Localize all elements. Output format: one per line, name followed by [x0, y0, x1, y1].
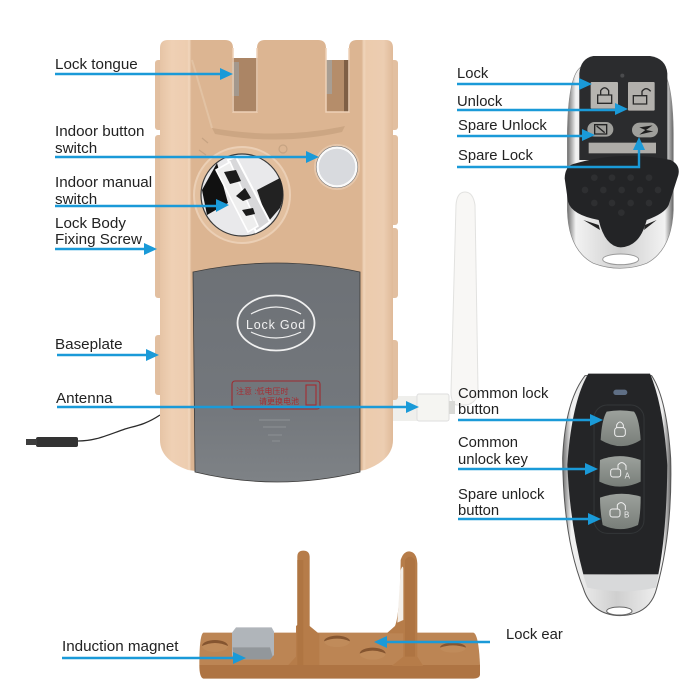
- label: lock body fixing screw: [55, 215, 157, 255]
- label: common unlock key: [458, 435, 598, 475]
- indoor manual switch: [194, 147, 290, 243]
- label: indoor button switch: switch: [55, 140, 97, 157]
- rubber cover: [565, 156, 679, 247]
- spare unlock button: [587, 122, 613, 137]
- label: unlock: [457, 94, 628, 115]
- label: lock body fixing screw: Lock Body: [55, 215, 126, 232]
- spare unlock button: B: [624, 510, 629, 519]
- label: common lock button: Common lock: [458, 386, 549, 402]
- label: spare lock: [457, 137, 645, 167]
- label: spare lock: Spare Lock: [458, 148, 533, 164]
- label: spare unlock: [457, 118, 595, 141]
- key fob 2: [563, 374, 671, 616]
- label: indoor manual switch: [55, 174, 229, 212]
- battery warning label: 注意 :低电压时: [236, 386, 288, 396]
- casing: [160, 40, 393, 482]
- label: lock body fixing screw: Fixing Screw: [55, 231, 142, 248]
- label: lock tongue: [55, 56, 233, 80]
- label: spare unlock button: [458, 487, 601, 525]
- label: antenna: Antenna: [56, 390, 113, 407]
- strike plate bracket: [199, 551, 480, 679]
- label: unlock: Unlock: [457, 94, 503, 110]
- battery warning label: 请更换电池: [259, 396, 299, 406]
- label: spare unlock button: Spare unlock: [458, 487, 545, 503]
- led: [620, 74, 624, 78]
- label: common unlock key: unlock key: [458, 452, 529, 468]
- lock tongue recess: [232, 48, 350, 112]
- engraved marks: [199, 138, 287, 155]
- label: lock: Lock: [457, 66, 489, 82]
- cable with plug: [26, 415, 160, 447]
- lock body: [155, 40, 398, 482]
- unlock button: [628, 82, 655, 111]
- label: indoor manual switch: Indoor manual: [55, 174, 152, 191]
- label: spare unlock button: button: [458, 503, 499, 519]
- spare unlock button: [600, 494, 641, 529]
- label: common lock button: button: [458, 402, 499, 418]
- side lugs: [155, 60, 398, 400]
- base top face: [199, 633, 480, 665]
- common unlock button: A: [625, 472, 631, 481]
- label: baseplate: Baseplate: [55, 336, 123, 353]
- label: lock ear: Lock ear: [506, 627, 563, 643]
- logo: Lock God: [246, 318, 306, 332]
- spare lock button: [632, 123, 658, 137]
- label: baseplate: [55, 336, 159, 361]
- induction magnet: [232, 627, 274, 659]
- label: indoor button switch: Indoor button: [55, 123, 145, 140]
- base front edge: [199, 665, 480, 679]
- black body: [579, 56, 667, 160]
- screw holes: [202, 636, 466, 660]
- label: lock ear: [374, 627, 563, 648]
- label: antenna: [56, 390, 419, 413]
- label: spare unlock: Spare Unlock: [458, 118, 547, 134]
- logo: [238, 296, 314, 350]
- common lock button: [601, 410, 641, 446]
- label: induction magnet: [62, 638, 246, 664]
- label: indoor manual switch: switch: [55, 191, 97, 208]
- key fob 1: [565, 56, 679, 268]
- label: common lock button: [458, 386, 603, 426]
- chrome frame: [567, 67, 673, 268]
- common unlock button: [599, 456, 641, 487]
- indoor button switch: [314, 144, 360, 190]
- grey cover plate: [193, 263, 360, 482]
- label: lock tongue: Lock tongue: [55, 56, 138, 73]
- right ear and gussets: [387, 551, 423, 666]
- label: indoor button switch: [55, 123, 319, 163]
- label: induction magnet: Induction magnet: [62, 638, 179, 655]
- antenna: [393, 192, 478, 421]
- left ear and gussets: [288, 551, 319, 665]
- lock button: [591, 82, 618, 109]
- label: common unlock key: Common: [458, 435, 518, 451]
- label: lock: [457, 66, 592, 90]
- battery warning label: [232, 381, 320, 409]
